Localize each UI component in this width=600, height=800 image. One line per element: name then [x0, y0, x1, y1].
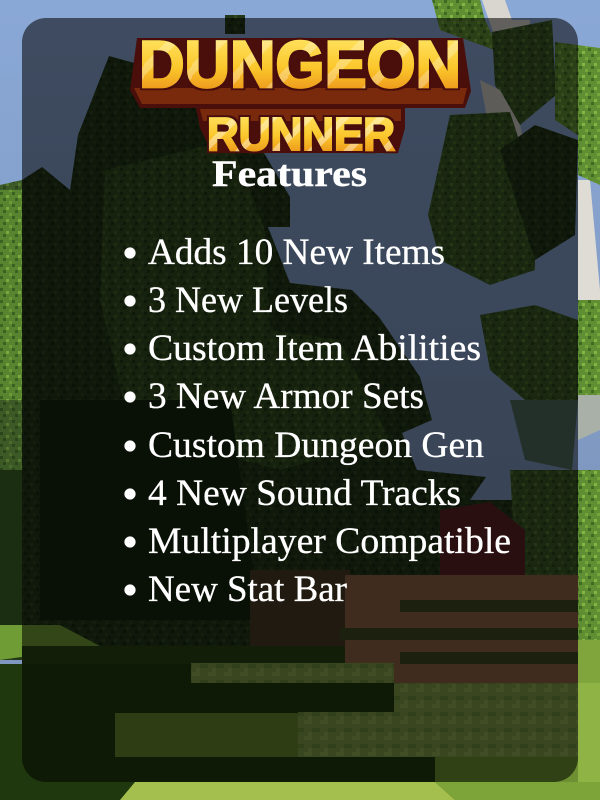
feature list: [124, 232, 511, 610]
item: 4 New Sound Tracks: 4 New Sound Tracks: [148, 473, 461, 514]
logo word: Runner: RUNNER: [207, 108, 395, 160]
item: New Stat Bar: New Stat Bar: [148, 569, 347, 610]
item: Multiplayer Compatible: Multiplayer Compatible: [148, 521, 511, 562]
item: 3 New Levels: 3 New Levels: [148, 280, 348, 321]
item: 3 New Armor Sets: 3 New Armor Sets: [148, 376, 424, 417]
item: Adds 10 New Items: Adds 10 New Items: [148, 232, 445, 273]
logo word: Dungeon: DUNGEON: [139, 27, 461, 101]
item: Custom Dungeon Gen: Custom Dungeon Gen: [148, 425, 484, 466]
logo: Dungeon Runner: [130, 27, 471, 160]
heading: Features: Features: [212, 154, 367, 195]
item: Custom Item Abilities: Custom Item Abilities: [148, 328, 481, 369]
